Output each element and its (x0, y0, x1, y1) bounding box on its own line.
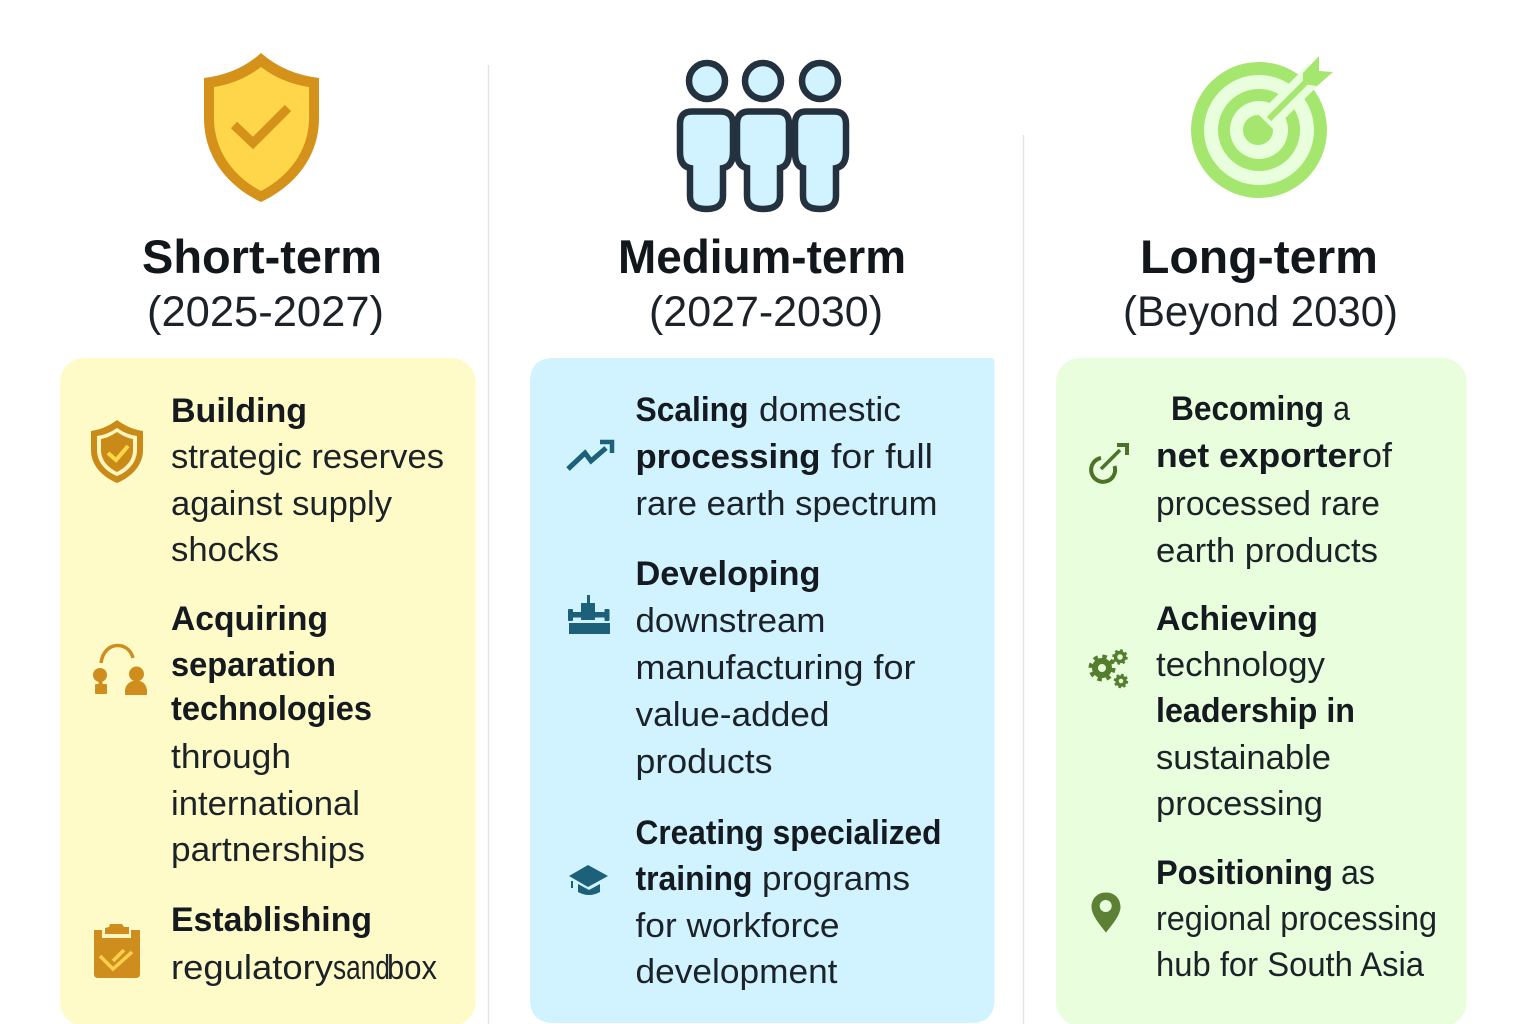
text: scaling: rare earth spectrum (636, 485, 938, 523)
icon: three people (680, 63, 846, 209)
icon: circular export arrow (1091, 445, 1127, 482)
text: creating: training (636, 860, 752, 898)
icon: small shield (91, 420, 143, 483)
text: developing: products (636, 743, 772, 781)
text: positioning: regional processing (1156, 900, 1437, 938)
text: achieving: leadership in (1156, 692, 1355, 730)
text: achieving: sustainable (1156, 739, 1331, 777)
text: acquiring (171, 600, 372, 869)
text: becoming: Becoming (1171, 390, 1324, 428)
text: creating: development (636, 953, 838, 991)
text: achieving: processing (1156, 785, 1323, 823)
text: developing: value-added (636, 696, 830, 734)
text: acquiring: Acquiring (171, 600, 328, 638)
heading: short-term: Short-term (142, 230, 382, 283)
panel: medium-term (530, 358, 994, 1023)
panel: long-term (1056, 358, 1466, 1024)
icon: clipboard check (94, 924, 140, 978)
text: building (171, 392, 444, 569)
text: positioning: Positioning (1156, 854, 1333, 892)
text: establishing: Establishing (171, 901, 372, 939)
text: developing (636, 555, 916, 781)
text: building: strategic reserves (171, 438, 444, 476)
text: creating: Creating specialized (636, 814, 942, 852)
heading: medium-term: Medium-term (618, 230, 906, 283)
text: developing: Developing (636, 555, 820, 593)
text: acquiring: international (171, 785, 360, 823)
text: achieving: technology (1156, 646, 1326, 684)
text: developing: downstream (636, 602, 826, 640)
text: creating (636, 814, 942, 991)
text: positioning (1156, 854, 1437, 984)
text: acquiring: technologies (171, 690, 372, 728)
heading: short-term: (2025-2027) (147, 288, 384, 336)
panel: short-term (60, 358, 476, 1024)
text: establishing: box (387, 949, 437, 987)
icon: graduation cap (569, 865, 608, 895)
icon: people with arc (93, 645, 147, 695)
text: achieving: Achieving (1156, 600, 1318, 638)
text: acquiring: separation (171, 646, 336, 684)
icon: gears (1090, 650, 1127, 687)
text: positioning: hub for South Asia (1156, 946, 1425, 984)
heading: medium-term (618, 230, 906, 336)
text: becoming: of (1362, 437, 1392, 475)
text: creating: for workforce (636, 907, 840, 945)
heading: long-term: (Beyond 2030) (1123, 288, 1398, 336)
heading: long-term (1123, 230, 1398, 336)
text: developing: manufacturing for (636, 649, 916, 687)
text: acquiring: partnerships (171, 831, 365, 869)
text: building: shocks (171, 531, 279, 569)
text: scaling (636, 391, 938, 523)
text: becoming: processed rare (1156, 485, 1380, 523)
text: creating: programs (762, 860, 910, 898)
text: establishing (171, 901, 437, 987)
text: becoming: earth products (1156, 532, 1378, 570)
text: becoming: a (1333, 390, 1351, 428)
icon: map pin (1092, 892, 1120, 932)
text: establishing: sand (333, 949, 390, 987)
icon: target with arrow (1191, 56, 1333, 198)
icon: trend arrow (568, 442, 612, 469)
heading: short-term (142, 230, 384, 336)
text: positioning: as (1341, 854, 1375, 892)
text: becoming: net exporter (1156, 437, 1361, 475)
text: building: Building (171, 392, 307, 430)
text: building: against supply (171, 485, 393, 523)
heading: long-term: Long-term (1140, 230, 1378, 283)
text: scaling: processing (636, 438, 820, 476)
text: becoming (1156, 390, 1392, 570)
icon: processing plant (568, 595, 610, 634)
text: acquiring: through (171, 738, 291, 776)
text: scaling: for full (831, 438, 933, 476)
icon: shield with check (204, 53, 319, 202)
text: scaling: Scaling (636, 391, 748, 429)
text: establishing: regulatory (171, 949, 334, 987)
heading: medium-term: (2027-2030) (649, 288, 883, 336)
text: scaling: domestic (759, 391, 901, 429)
text: achieving (1156, 600, 1355, 823)
